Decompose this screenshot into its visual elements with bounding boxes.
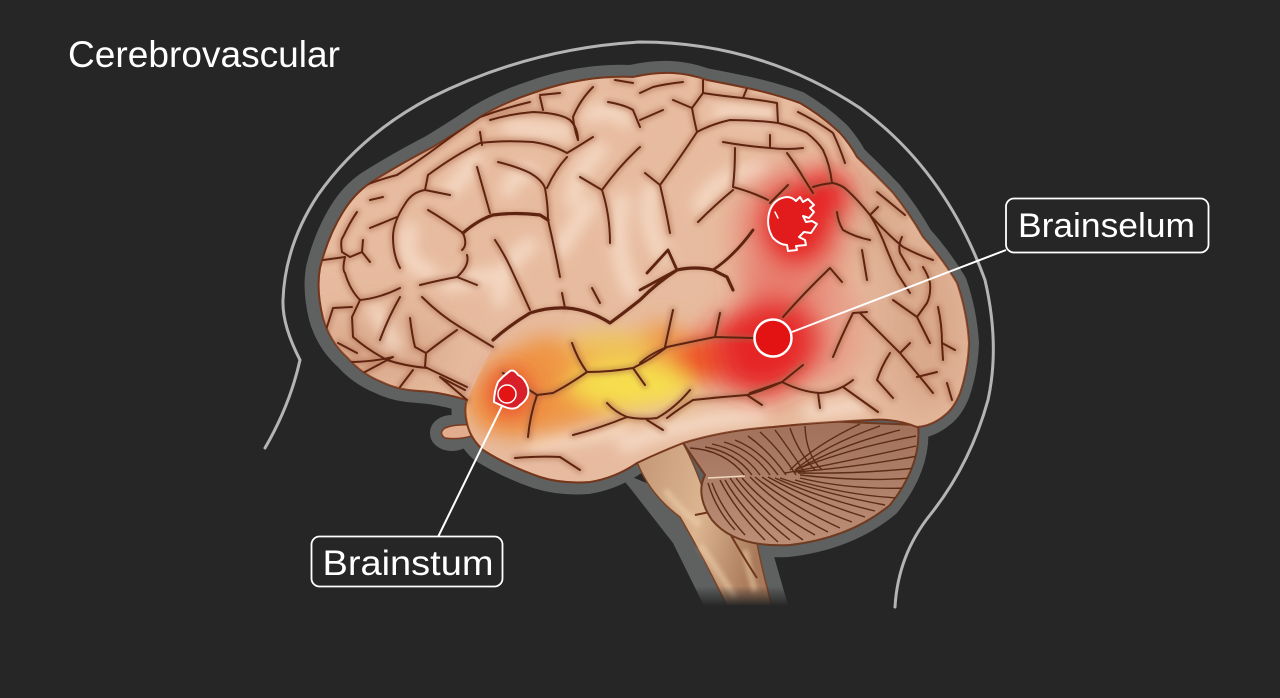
title: Cerebrovascular: [68, 34, 340, 75]
gyrus highlights: [375, 111, 860, 445]
cerebrum: [319, 73, 969, 482]
leader line to Brainselum: [792, 250, 1006, 332]
leader line to Brainstum: [438, 406, 502, 537]
brainstem: [637, 443, 772, 606]
label: Brainselum: Brainselum: [1018, 207, 1195, 245]
cerebellum: [683, 420, 918, 545]
red glow patches: [490, 165, 862, 415]
sulci soft shadow: [323, 80, 955, 470]
gray halo around brain: [317, 73, 967, 612]
lesion: upper irregular: [768, 197, 817, 251]
olfactory nub: [442, 425, 472, 439]
brain illustration: [310, 73, 970, 618]
marker: red circle: [754, 320, 792, 356]
fade at stem base: [690, 586, 810, 606]
sulci lines: [323, 80, 955, 470]
label: Brainstum: [312, 536, 502, 586]
lesion: lower with dot: [494, 370, 528, 409]
head silhouette outline: [265, 42, 993, 607]
label: Brainstum: Brainstum: [322, 544, 494, 583]
label: Brainselum: [1006, 198, 1208, 252]
ambient shading: [310, 150, 970, 420]
ischemia glow: [462, 165, 862, 438]
temporal yellow-orange glow: [462, 320, 735, 438]
